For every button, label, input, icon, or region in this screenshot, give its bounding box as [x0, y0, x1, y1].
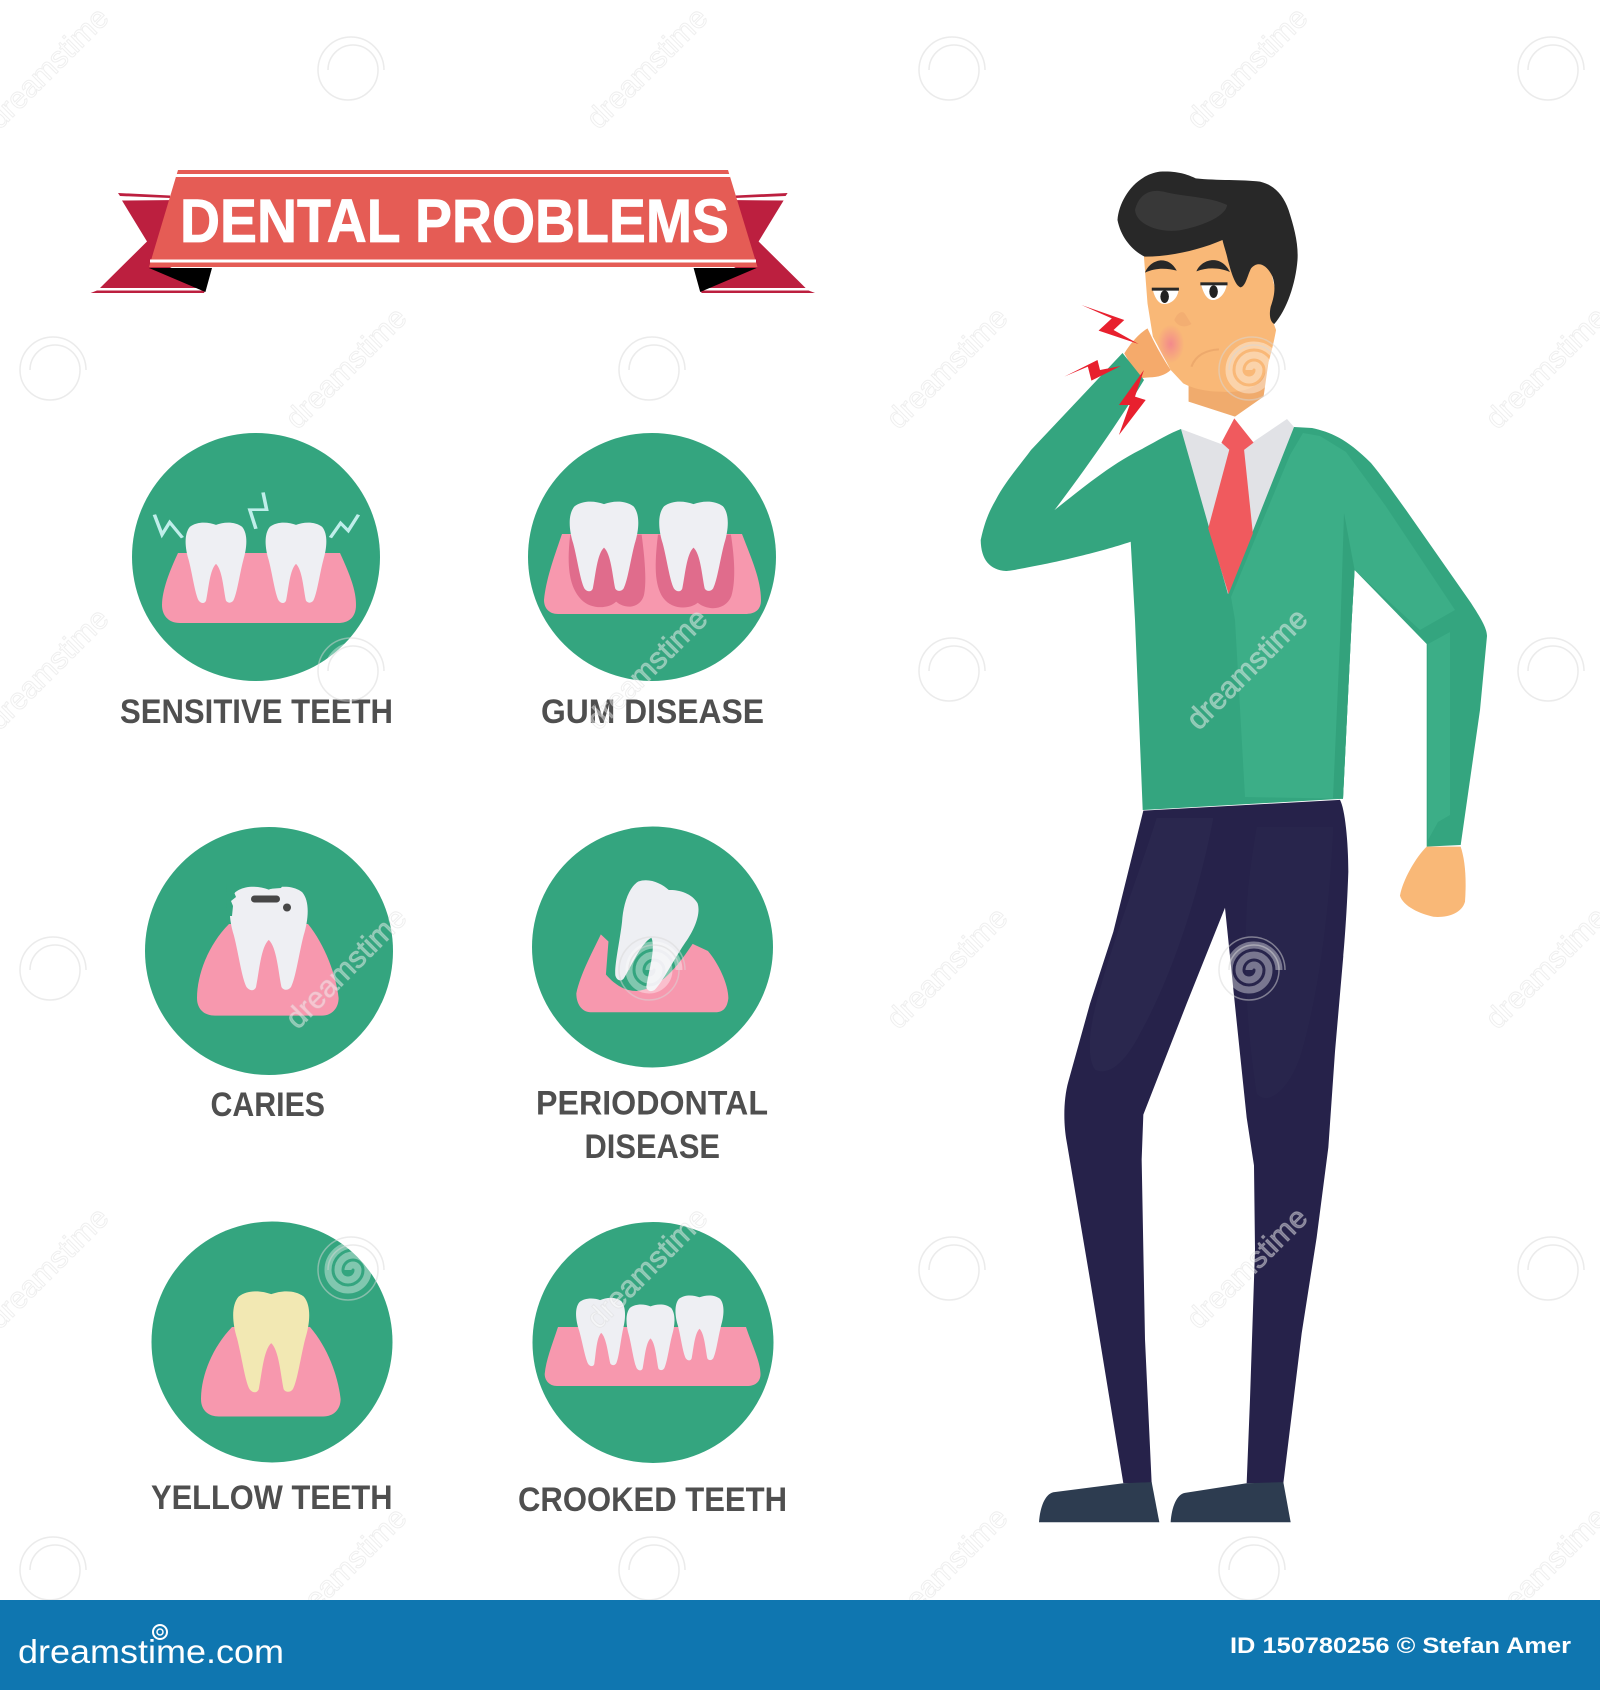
necktie — [1208, 418, 1254, 594]
label: periodontal disease — [536, 1084, 768, 1166]
tilted tooth — [599, 875, 704, 998]
watermarks: dreamstime — [880, 301, 1014, 435]
watermarks: dreamstime — [1180, 1201, 1314, 1335]
hand on cheek — [1124, 328, 1171, 378]
watermarks: dreamstime — [580, 602, 714, 736]
panel: yellow teeth — [152, 1222, 392, 1462]
gum — [545, 1327, 760, 1386]
tooth left — [570, 502, 638, 591]
gum — [201, 1327, 341, 1416]
label: periodontal disease: PERIODONTAL — [536, 1084, 768, 1122]
panel: periodontal disease — [532, 826, 773, 1068]
watermarks: dreamstime — [279, 301, 413, 435]
label: sensitive teeth: SENSITIVE TEETH — [120, 693, 393, 731]
label: crooked teeth: CROOKED TEETH — [518, 1481, 787, 1519]
gum — [197, 924, 339, 1016]
right hand — [1400, 847, 1466, 917]
cheek flush — [1157, 325, 1184, 363]
jacket right front lighter panel — [1231, 433, 1455, 799]
circle — [532, 826, 773, 1068]
label: periodontal disease: DISEASE — [584, 1128, 720, 1166]
tooth left — [186, 523, 246, 603]
icon: pain bolts — [1064, 305, 1146, 435]
watermarks: dreamstime — [880, 901, 1014, 1035]
banner stripes — [150, 174, 756, 262]
inflamed gum — [569, 535, 734, 608]
jacket — [981, 353, 1487, 847]
circle — [152, 1222, 392, 1462]
watermarks: dreamstime — [1180, 602, 1314, 736]
label: caries: CARIES — [210, 1086, 325, 1124]
title text: DENTAL PROBLEMS — [180, 187, 729, 255]
decay spots — [251, 896, 291, 912]
watermarks: dreamstime — [580, 1, 714, 135]
sleeve lighter strip — [1428, 632, 1450, 840]
nose — [1174, 312, 1191, 326]
yellow tooth — [233, 1291, 309, 1392]
circle — [528, 433, 776, 681]
footer bar — [0, 1600, 1600, 1690]
title banner — [91, 170, 815, 293]
tooth chipped top — [262, 885, 283, 889]
jacket armpit shadow — [1333, 513, 1355, 799]
head and raised hand — [1117, 172, 1298, 417]
hair — [1117, 172, 1298, 324]
gum — [576, 934, 728, 1012]
left eye — [1152, 288, 1179, 304]
face — [1144, 240, 1276, 392]
banner main ribbon — [149, 170, 758, 267]
label: yellow teeth: YELLOW TEETH — [151, 1479, 392, 1517]
footer logo: dreamstime.com — [18, 1633, 284, 1670]
tooth right — [266, 523, 326, 603]
icon: sensitivity sparks — [154, 492, 358, 538]
trousers — [1064, 800, 1348, 1483]
panel: caries — [145, 827, 393, 1075]
tooth middle — [626, 1304, 675, 1370]
circle — [132, 433, 380, 681]
hair highlight — [1135, 191, 1227, 231]
watermarks: dreamstime — [1180, 1, 1314, 135]
watermarks: dreamstime — [279, 1501, 413, 1635]
circle — [145, 827, 393, 1075]
panel: gum disease — [528, 433, 776, 681]
character: man with toothache — [981, 172, 1487, 1522]
watermarks: dreamstime — [580, 1201, 714, 1335]
tooth left — [576, 1297, 627, 1367]
watermarks: dreamstime — [279, 901, 413, 1035]
watermarks: dreamstime — [880, 1501, 1014, 1635]
tooth — [230, 887, 308, 990]
footer credit: ID 150780256 © Stefan Amer — [1230, 1633, 1571, 1658]
banner right tail — [694, 193, 815, 293]
panel: sensitive teeth — [132, 433, 380, 681]
tooth back right — [675, 1295, 724, 1360]
right eye — [1200, 282, 1227, 300]
label: gum disease: GUM DISEASE — [541, 693, 764, 731]
gum — [162, 553, 356, 623]
mouth swelling — [1191, 349, 1219, 367]
circle — [532, 1222, 774, 1463]
tooth right — [659, 502, 728, 591]
neck — [1189, 347, 1271, 417]
eyebrows — [1145, 260, 1230, 273]
banner left tail — [91, 193, 212, 293]
tooth chipped corner — [226, 884, 241, 916]
panel: crooked teeth — [532, 1222, 774, 1463]
gum — [544, 534, 761, 614]
shoes — [1039, 1482, 1291, 1522]
shirt — [1181, 419, 1294, 594]
